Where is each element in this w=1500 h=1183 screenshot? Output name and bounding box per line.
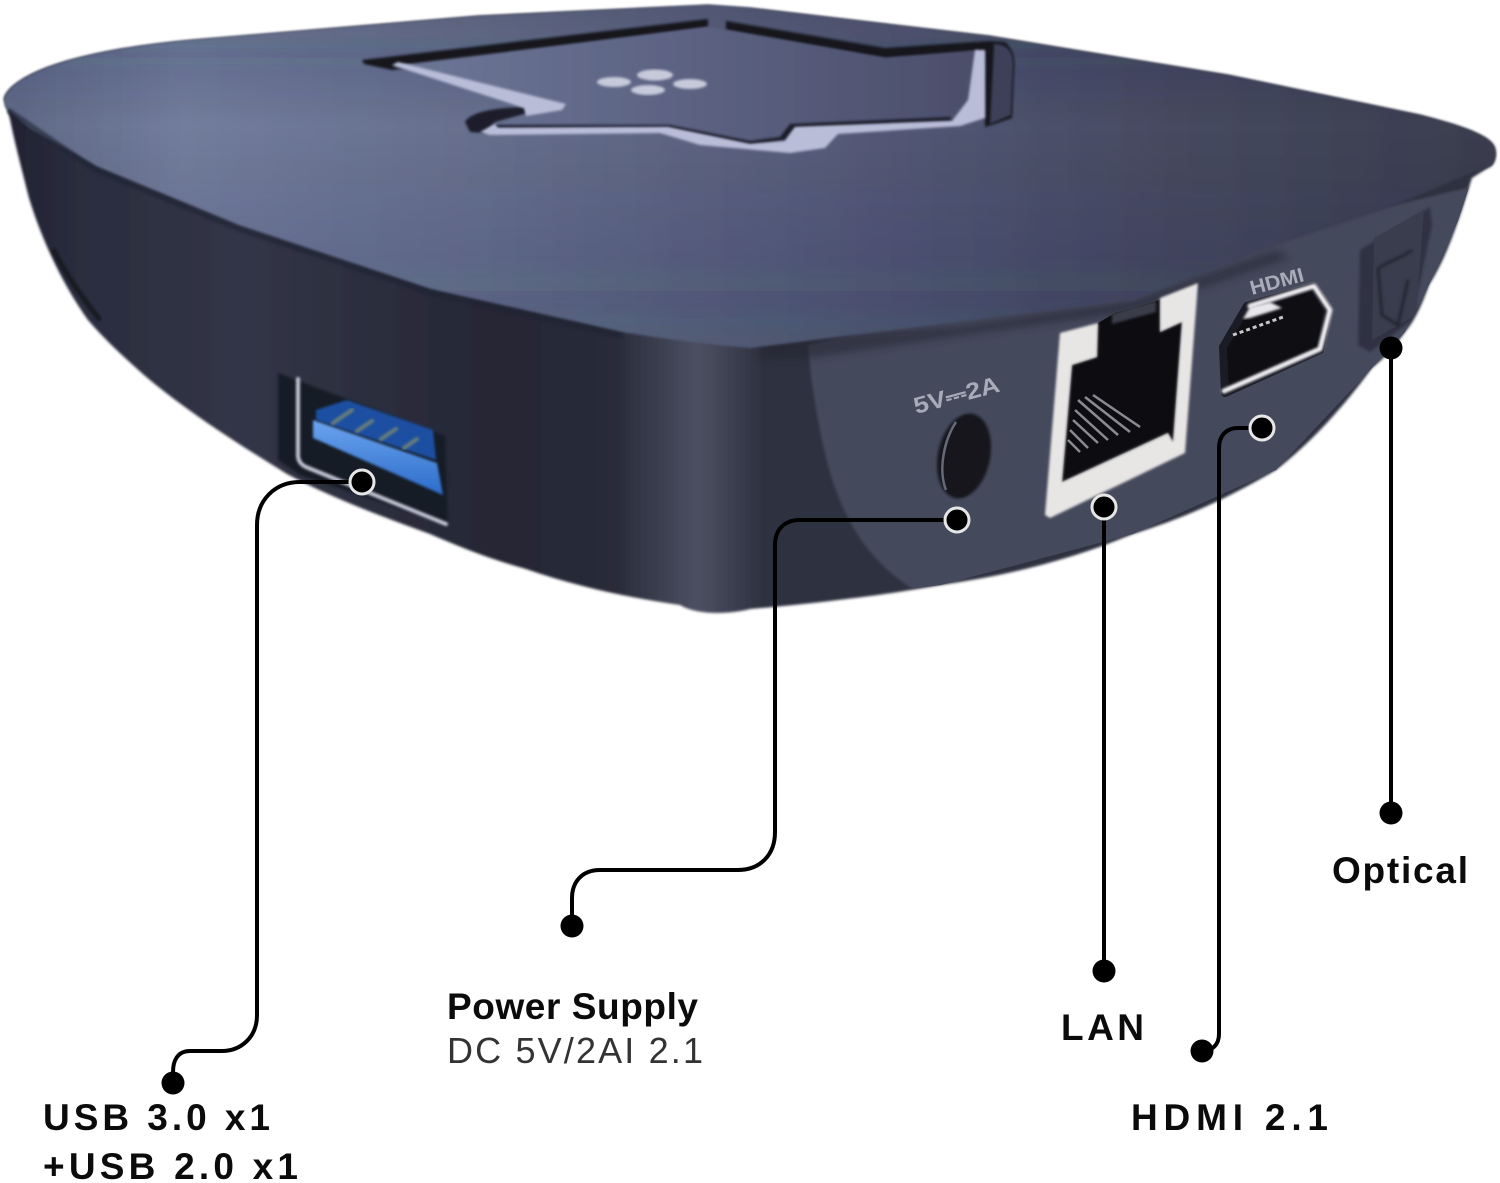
power jack	[930, 409, 998, 503]
callout: USB	[162, 470, 374, 1094]
star logo recess	[362, 19, 1014, 153]
lan pins	[1068, 395, 1140, 452]
callout: Optical	[1380, 336, 1402, 824]
callout: Power	[560, 508, 969, 938]
top lip shadow	[8, 110, 622, 336]
usb port trim	[298, 379, 446, 524]
lan frame	[1045, 283, 1198, 518]
5V 2A printed label: 5V⎓2A	[911, 371, 1002, 419]
lan socket	[1062, 300, 1182, 482]
label: LAN: LAN	[1061, 1007, 1144, 1048]
label: Power Supply	[447, 986, 703, 1071]
star light edge	[392, 50, 985, 153]
label: USB: USB 3.0 x1	[43, 1097, 270, 1138]
hdmi printed label: HDMI	[1248, 264, 1306, 300]
label: HDMI 2.1: HDMI 2.1	[1131, 1097, 1328, 1138]
lan port	[1045, 283, 1198, 518]
hdmi socket	[1223, 287, 1328, 393]
device side wall	[4, 5, 1496, 613]
label: Power Supply: DC 5V/2AI 2.1	[447, 1030, 703, 1071]
label: USB	[43, 1097, 298, 1183]
star face	[392, 27, 978, 142]
callout: HDMI	[1190, 416, 1274, 1062]
label: Optical: Optical	[1332, 850, 1468, 891]
recess dark groove	[362, 19, 1014, 127]
logo dots	[597, 70, 707, 95]
label: Power Supply: Power Supply	[447, 986, 698, 1027]
power jack and label	[911, 371, 1002, 503]
hdmi port	[1223, 264, 1330, 393]
device body	[4, 5, 1500, 640]
usb port	[278, 373, 448, 525]
device top surface	[4, 5, 1496, 348]
usb blue tongue	[316, 400, 436, 460]
callout: LAN	[1092, 495, 1116, 982]
right rear panel	[53, 180, 1500, 640]
